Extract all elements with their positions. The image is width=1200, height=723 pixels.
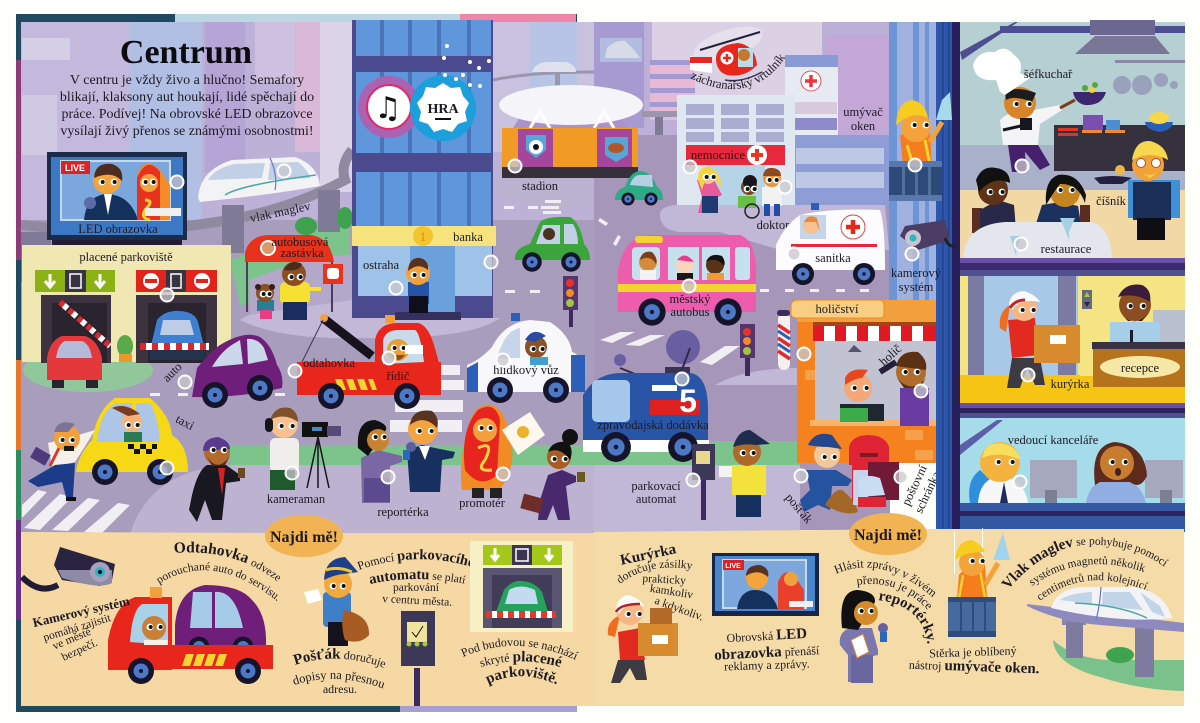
label: parkovací automat: parkovací [631, 479, 681, 493]
play button [410, 44, 491, 141]
traffic light [740, 324, 755, 376]
label: parkovací automat [631, 479, 681, 506]
text: LED: reklamy a zprávy. [724, 657, 810, 673]
window cleaner [889, 92, 952, 201]
reporter illustration [840, 590, 888, 683]
receptionist: recepce [1121, 361, 1160, 375]
label: umývač oken [843, 105, 883, 133]
police car [467, 313, 585, 403]
office [960, 418, 1185, 532]
parking building [22, 245, 231, 388]
plant [117, 335, 133, 362]
find me bubble: Najdi mě! [854, 527, 922, 544]
hot dog promoter [461, 405, 545, 498]
distant maglev [493, 62, 594, 86]
label: poštovní schránka: poštovní [899, 462, 930, 508]
label: šéfkuchař: šéfkuchař [1024, 67, 1073, 81]
label: ostraha: ostraha [363, 258, 399, 272]
text: courier: prakticky [642, 573, 686, 587]
book cover edges [16, 14, 577, 712]
label: městský autobus [670, 292, 711, 319]
intro text: vysílají živý přenos se známými osobnostmi! [60, 124, 314, 139]
road markings [22, 200, 561, 533]
panel: right info strip [594, 513, 1184, 706]
label: městský autobus: autobus [671, 305, 710, 319]
label: placené parkoviště: placené parkoviště [79, 250, 173, 264]
text: parking: Pod budovou se nachází [460, 638, 579, 660]
text: courier: kamkoliv [649, 583, 694, 601]
find me bubble [849, 513, 927, 555]
text: LED [714, 626, 820, 673]
hospital [677, 55, 890, 205]
teal car [615, 171, 663, 206]
red car in garage [47, 336, 102, 388]
parking meter illustration [401, 611, 435, 706]
text: parking: parkoviště. [486, 666, 557, 687]
office woman [1086, 442, 1147, 503]
text: camera: ve městě [51, 626, 93, 653]
floor separator [960, 403, 1185, 418]
intro text: práce. Podívej! Na obrovské LED obrazovce [61, 107, 313, 122]
news van: 5 [679, 383, 697, 419]
maglev track [21, 150, 352, 282]
label: stadion: stadion [522, 179, 559, 193]
text: courier: doručuje zásilky [618, 560, 693, 583]
title: Centrum [120, 34, 252, 71]
green car [515, 217, 590, 272]
floor separator [960, 258, 1185, 276]
label: záchranářský vrtulník: záchranářský vrtulník [690, 54, 785, 90]
tall blue facade [889, 22, 960, 532]
text: courier [618, 541, 705, 624]
text: maglev: Vlak maglev se pohybuje pomocí [1000, 537, 1169, 586]
label: LED obrazovka: LED obrazovka [78, 222, 158, 236]
stadium [499, 85, 643, 178]
round table [963, 218, 1112, 258]
bearded businessman [189, 437, 245, 522]
man in suit [403, 411, 455, 492]
courier illustration [608, 595, 678, 683]
text: camera [31, 593, 131, 664]
text: window cleaner: Stěrka je oblíbený [929, 643, 1017, 661]
postman illustration [304, 557, 369, 646]
label: umývač oken: umývač [843, 105, 883, 119]
text: parking meter: parkování [393, 582, 440, 594]
parking garage illustration [470, 541, 573, 632]
text: camera: Kamerový systém [31, 593, 131, 630]
find me bubble [265, 515, 343, 557]
label: banka: banka [453, 230, 483, 244]
window cleaner illustration [948, 528, 1010, 637]
text: maglev: systému magnetů několik [1030, 556, 1146, 586]
music button: ♫ [375, 91, 401, 126]
bus stop: autobusová [272, 235, 329, 249]
reporter on screen [84, 164, 138, 220]
text: parking meter: v centru města. [382, 593, 453, 609]
news van [583, 330, 709, 462]
label: poštovní schránka [899, 462, 943, 515]
intro text: V centru je vždy živo a hlučno! Semafory [70, 73, 304, 88]
bank tower [352, 20, 496, 320]
text: tow truck [156, 542, 280, 601]
hospital people [697, 167, 782, 218]
bus stop: zastávka [280, 246, 324, 260]
panel: left info strip [20, 515, 594, 706]
intro text [60, 73, 314, 139]
label: sanitka: sanitka [815, 251, 851, 265]
label: odtahovka: odtahovka [303, 356, 355, 370]
parking attendant [692, 430, 770, 520]
post box [849, 435, 899, 507]
traffic light [563, 276, 578, 327]
LED screen [47, 152, 187, 246]
ground road [21, 163, 660, 534]
text: courier: a kdykoliv. [653, 595, 705, 624]
purple car [192, 335, 282, 408]
reception [960, 276, 1185, 403]
text: reporter: přenosu je práce [856, 576, 931, 610]
running man [28, 422, 95, 501]
courier [1000, 291, 1080, 388]
taxi [76, 398, 188, 485]
label: řídič: řídič [387, 369, 410, 383]
text: parking meter: Pomocí parkovacího [356, 549, 470, 570]
label: vedoucí kanceláře: vedoucí kanceláře [1008, 433, 1099, 447]
label: číšník: číšník [1096, 194, 1127, 208]
pink bus [618, 235, 756, 326]
panel: right page city scene [499, 20, 1185, 532]
woman with briefcase [520, 429, 585, 520]
elevator buttons [1082, 290, 1092, 309]
sky with buildings [21, 22, 594, 534]
text: parking meter: automatu se platí [370, 570, 466, 584]
label: promotér: promotér [459, 496, 506, 510]
label: doktor: doktor [757, 218, 790, 232]
bushes [295, 207, 353, 235]
maglev train [198, 157, 320, 202]
text: postman: Pošťák doručuje [292, 648, 386, 668]
waiter [1094, 141, 1180, 240]
tower building floors [960, 20, 1185, 532]
label: restaurace: restaurace [1041, 242, 1092, 256]
text: postman: adresu. [323, 682, 357, 696]
text: courier: Kurýrka [619, 541, 678, 569]
diners [972, 168, 1090, 233]
guard [406, 258, 430, 313]
kitchen [960, 20, 1185, 258]
label: umývač oken: oken [851, 119, 876, 133]
label: holič: holič [876, 341, 905, 369]
blue car in garage [150, 311, 205, 360]
road markings [598, 218, 869, 365]
label: reportérka: reportérka [377, 505, 429, 519]
woman reporter [358, 420, 402, 503]
label: pošťák: pošťák [783, 491, 816, 527]
panel: left page city scene [21, 20, 660, 534]
text: reporter: reportérky. [878, 593, 934, 644]
text: tow truck: porouchané auto do servisu. [156, 562, 278, 601]
label: hlídkový vůz: hlídkový vůz [493, 363, 559, 377]
hotspot dots [160, 158, 1034, 488]
chef [973, 49, 1106, 172]
text: LED: Obrovská LED [726, 626, 808, 646]
LED screen: LIVE [65, 163, 85, 173]
text: camera: bezpečí. [60, 637, 100, 664]
security camera [900, 220, 955, 250]
text: window cleaner: nástroj umývače oken. [909, 657, 1040, 677]
label: auto: auto [160, 360, 185, 385]
music button [358, 76, 420, 138]
helicopter [689, 20, 767, 81]
barber shop [777, 300, 936, 463]
label: poštovní schránka: schránka [912, 469, 943, 515]
tow truck [297, 314, 441, 409]
sky [594, 22, 890, 222]
text: window cleaner [909, 643, 1040, 677]
text: LED: obrazovka přenáší [714, 642, 820, 664]
label: kurýrka: kurýrka [1051, 377, 1090, 391]
text: parking [460, 638, 579, 687]
ambulance [776, 203, 885, 285]
label: vlak maglev: vlak maglev [249, 199, 312, 225]
LED screen illustration: LIVE [725, 563, 741, 570]
hot dog on screen [137, 164, 181, 220]
text: postman [292, 648, 386, 696]
text: parking meter [356, 549, 470, 609]
LED screen illustration [712, 553, 819, 616]
text: reporter: Hlásit zprávy v živém [834, 560, 936, 598]
label: kamerový systém [891, 266, 942, 294]
office manager [969, 442, 1028, 503]
cameraman [265, 408, 341, 490]
label: zpravodajská dodávka: zpravodajská dodávka [597, 418, 709, 432]
label: kamerový systém: systém [899, 280, 934, 294]
barber pole [777, 310, 790, 370]
hospital: nemocnice [691, 148, 746, 162]
maglev illustration [1027, 587, 1184, 691]
label: kameraman: kameraman [267, 492, 326, 506]
label: holičství: holičství [815, 302, 859, 316]
receptionist [1092, 284, 1185, 387]
play button: HRA [427, 102, 459, 117]
text: parking: skryté placené [480, 650, 562, 667]
customer and barber [840, 352, 929, 426]
bank tower: 1 [420, 229, 426, 244]
intro text: blikají, klaksony aut houkají, lidé spěchají do [60, 90, 314, 105]
label: městský autobus: městský [670, 292, 711, 306]
camera illustration [22, 547, 115, 589]
ground [594, 135, 890, 532]
adult and child at stop [255, 262, 321, 320]
bus stop [245, 235, 343, 312]
striped barriers [60, 302, 209, 350]
tow truck illustration [108, 585, 273, 684]
label: kamerový systém: kamerový [891, 266, 942, 280]
text: camera: pomáhá zajistit [42, 612, 113, 644]
text: tow truck: Odtahovka odveze [174, 542, 280, 582]
text: reporter [834, 560, 936, 644]
find me bubble: Najdi mě! [270, 529, 338, 546]
text: maglev: centimetrů nad kolejnicí. [1038, 572, 1148, 600]
text: postman: dopisy na přesnou [293, 672, 384, 688]
postman [800, 434, 858, 513]
label: parkovací automat: automat [636, 492, 677, 506]
label: taxi: taxi [173, 412, 197, 433]
